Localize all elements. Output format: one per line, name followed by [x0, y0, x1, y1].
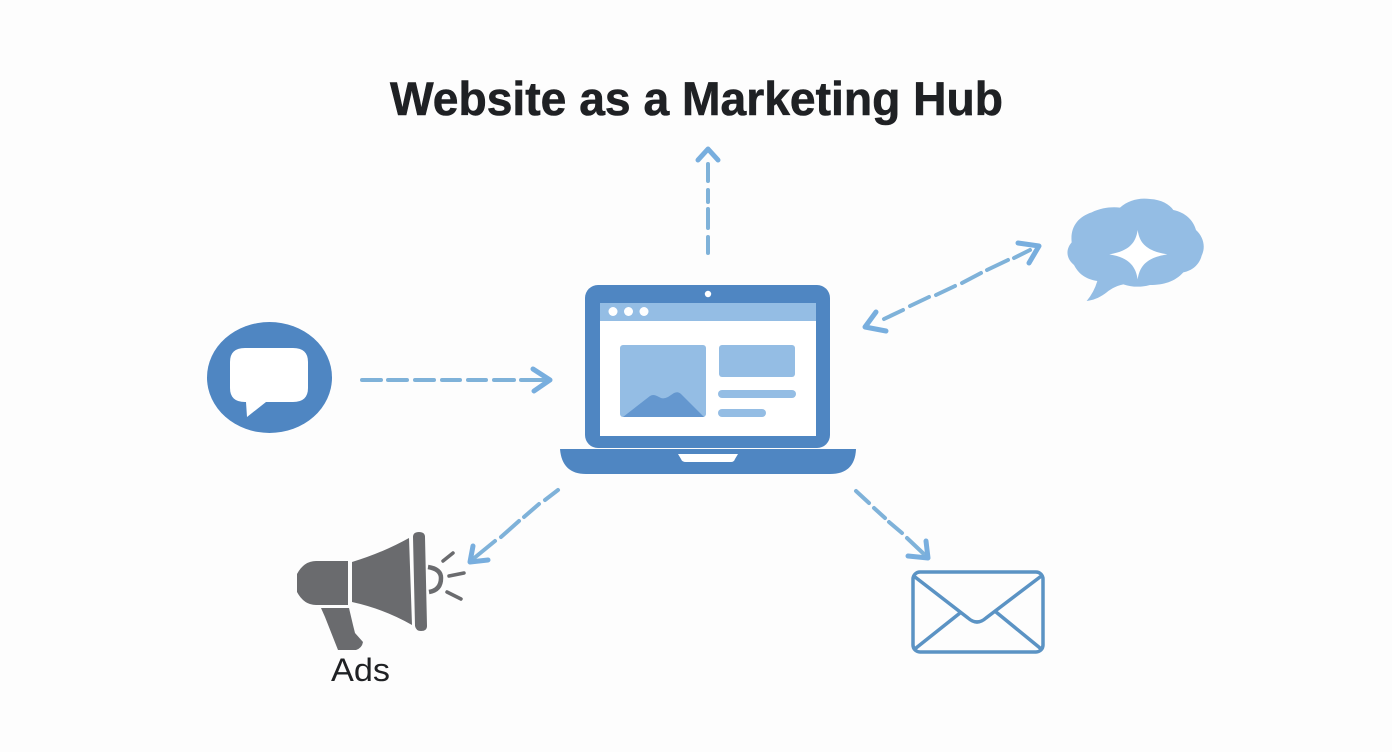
icon: laptop: [560, 285, 856, 474]
laptop base: [560, 449, 856, 474]
icon: megaphone: [297, 532, 464, 650]
title: Website as a Marketing Hub: [390, 72, 1003, 125]
text line long: [718, 390, 796, 398]
arrow: two-way laptop and cloud: [865, 243, 1039, 331]
browser dots: [608, 307, 648, 316]
icon: cloud with sparkle: [1067, 199, 1204, 301]
webcam: [705, 291, 711, 297]
icon: chat bubble: [207, 322, 332, 433]
megaphone body: [297, 561, 348, 605]
megaphone handle: [321, 608, 363, 650]
sound arc: [428, 567, 441, 592]
arrow: laptop to ads: [470, 490, 558, 562]
browser bar: [600, 303, 816, 321]
arrow: up from laptop: [698, 149, 718, 253]
megaphone cone: [352, 538, 412, 625]
content block: [719, 345, 795, 377]
text line short: [718, 409, 766, 417]
laptop lid: [585, 285, 830, 448]
sound rays: [443, 553, 464, 599]
icon: envelope: [913, 572, 1043, 652]
screen: [600, 303, 816, 436]
label: Ads: Ads: [331, 652, 390, 688]
arrow: chat to laptop: [362, 369, 550, 391]
megaphone rim: [413, 532, 427, 631]
base notch: [678, 454, 738, 462]
image mountain: [623, 392, 704, 417]
arrow: laptop to email: [856, 491, 928, 558]
image placeholder: [620, 345, 706, 417]
